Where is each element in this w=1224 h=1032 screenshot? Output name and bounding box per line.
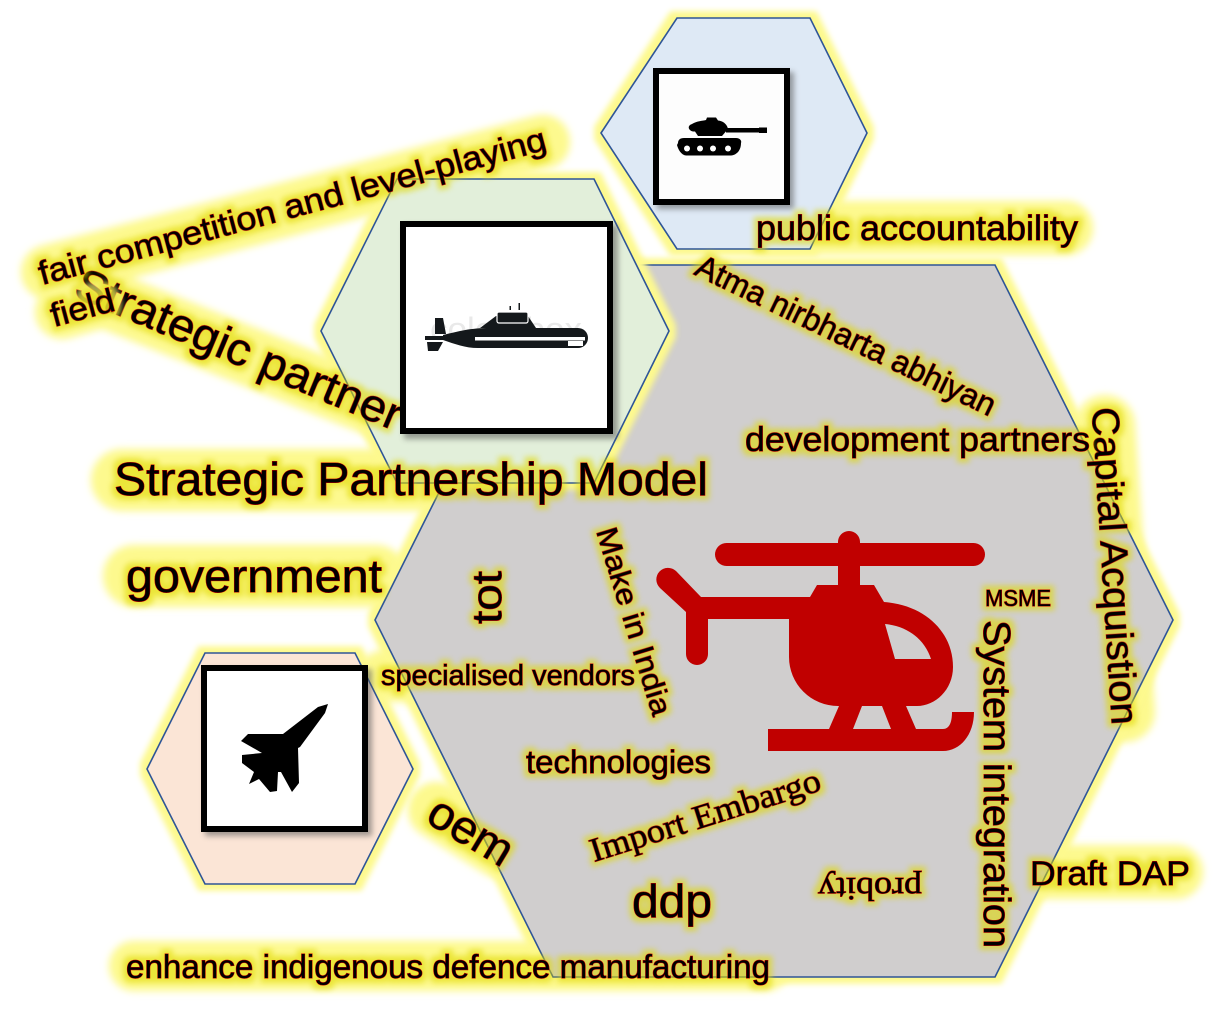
text: probity: probity: [817, 870, 922, 906]
panel: peach hexagon: [147, 653, 413, 884]
text: fair competition and level-playing field: [34, 120, 550, 334]
text: Draft DAP: Draft DAP: [1030, 855, 1190, 893]
pale wash over the start of Strategic partner: [74, 281, 122, 325]
icon: helicopter: [656, 531, 985, 751]
text: MSME: MSME: [985, 585, 1051, 611]
icon: submarine box: [403, 224, 618, 439]
panel: green hexagon: [321, 179, 669, 483]
icon: tank box: [656, 71, 794, 209]
text: government: government: [126, 550, 382, 602]
text: ddp: ddp: [632, 875, 712, 927]
text: tot: tot: [463, 571, 510, 624]
text: public accountability: public accountability: [756, 209, 1079, 248]
text: Import Embargo: Import Embargo: [585, 762, 825, 870]
text: System integration: System integration: [975, 620, 1017, 948]
icon: submarine box: colourbox: [430, 311, 582, 347]
heading: Strategic Partnership Model: Strategic Partnership Model: [114, 453, 708, 505]
text: Atma nirbharta abhiyan: Atma nirbharta abhiyan: [690, 248, 1002, 423]
text: specialised vendors: specialised vendors: [381, 660, 635, 692]
icon: fighter jet box: [204, 668, 372, 836]
text: fair competition and level-playing field: fair competition and level-playing: [34, 120, 550, 292]
text: enhance indigenous defence manufacturing: enhance indigenous defence manufacturing: [126, 948, 770, 985]
pale glow behind text: [48, 142, 1176, 966]
panel: large grey hexagon: [375, 265, 1173, 977]
text: technologies: technologies: [526, 744, 711, 780]
panel: blue hexagon: [601, 18, 867, 249]
text: development partners: development partners: [745, 421, 1090, 459]
text: Strategic partner: Strategic partner: [68, 258, 411, 440]
text: Capital Acquistion: Capital Acquistion: [1083, 406, 1145, 726]
text: Make in India: Make in India: [589, 523, 678, 720]
text: oem: oem: [419, 785, 524, 876]
text: fair competition and level-playing field: field: [46, 281, 119, 334]
